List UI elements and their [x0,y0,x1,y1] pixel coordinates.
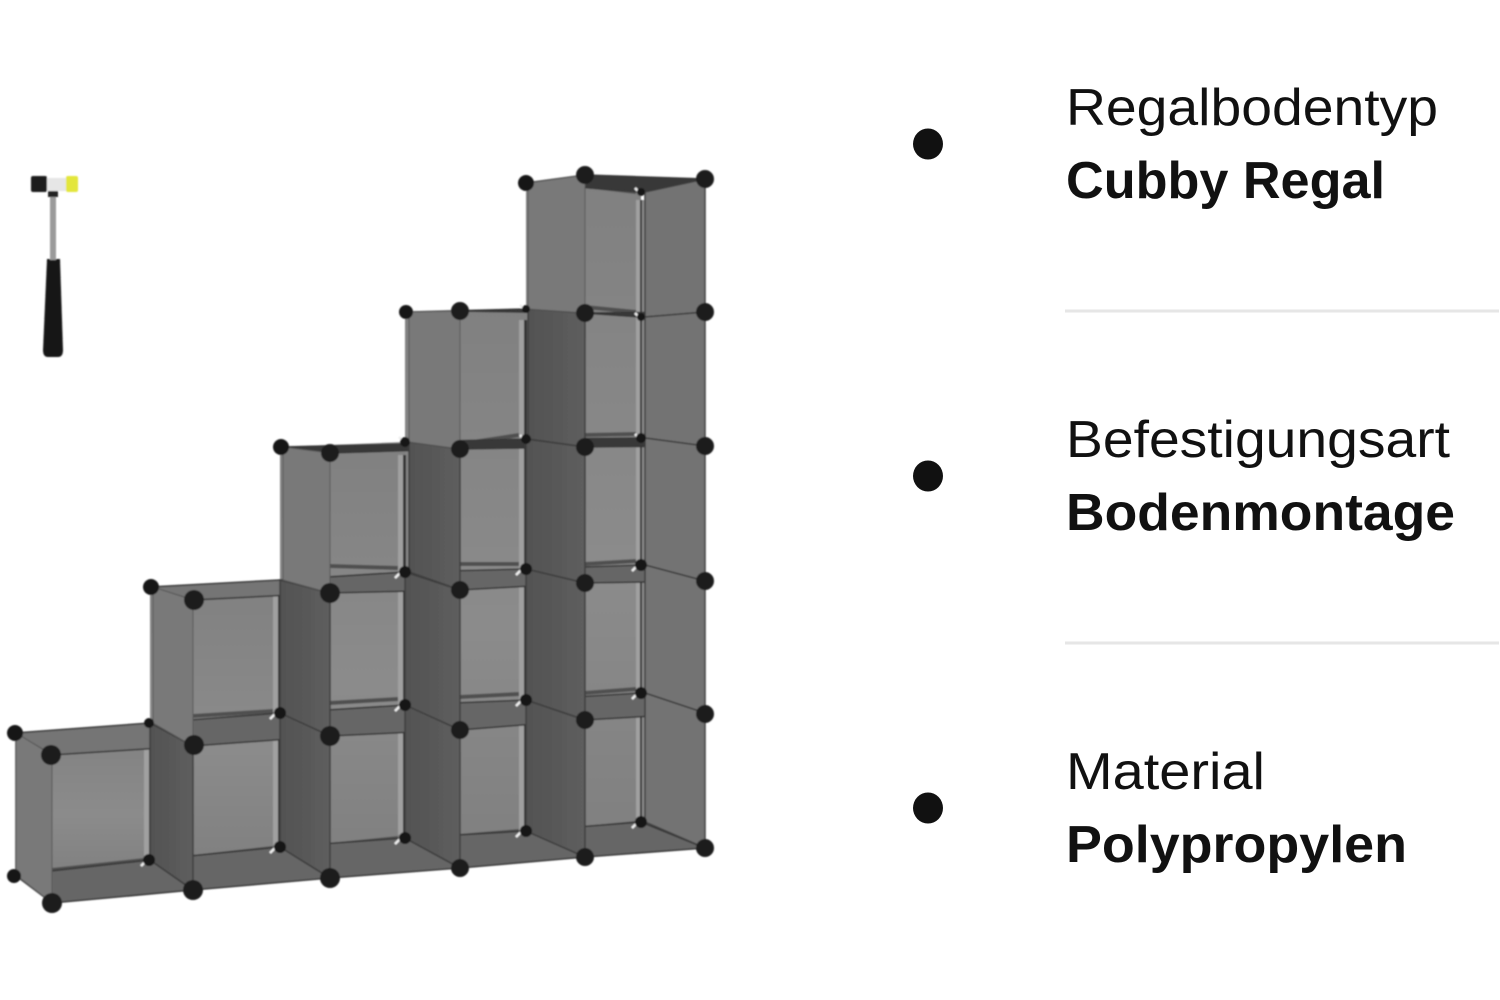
label: Befestigungsart [1066,411,1451,469]
right outer wall panels [645,179,705,848]
shelves and top surfaces [15,175,705,903]
back panels [15,183,641,875]
value: Polypropylen [1066,816,1407,874]
icon: rubber mallet [31,176,78,357]
value: Bodenmontage [1066,484,1455,542]
label: Regalbodentyp [1066,79,1438,137]
value: Cubby Regal [1066,152,1385,210]
front connectors [41,166,714,913]
spec: mounting type [913,411,1455,542]
white corner highlights [141,188,640,866]
bullet [913,792,943,824]
spec: shelf type [913,79,1438,210]
bullet [913,460,943,492]
spec: material [913,743,1407,874]
label: Material [1066,743,1265,801]
back connectors [7,175,647,883]
shelving unit: 15 grey cubes in stair formation [7,166,714,913]
exterior left panels [16,175,585,903]
bullet [913,128,943,160]
dark interior side panels [150,309,585,890]
